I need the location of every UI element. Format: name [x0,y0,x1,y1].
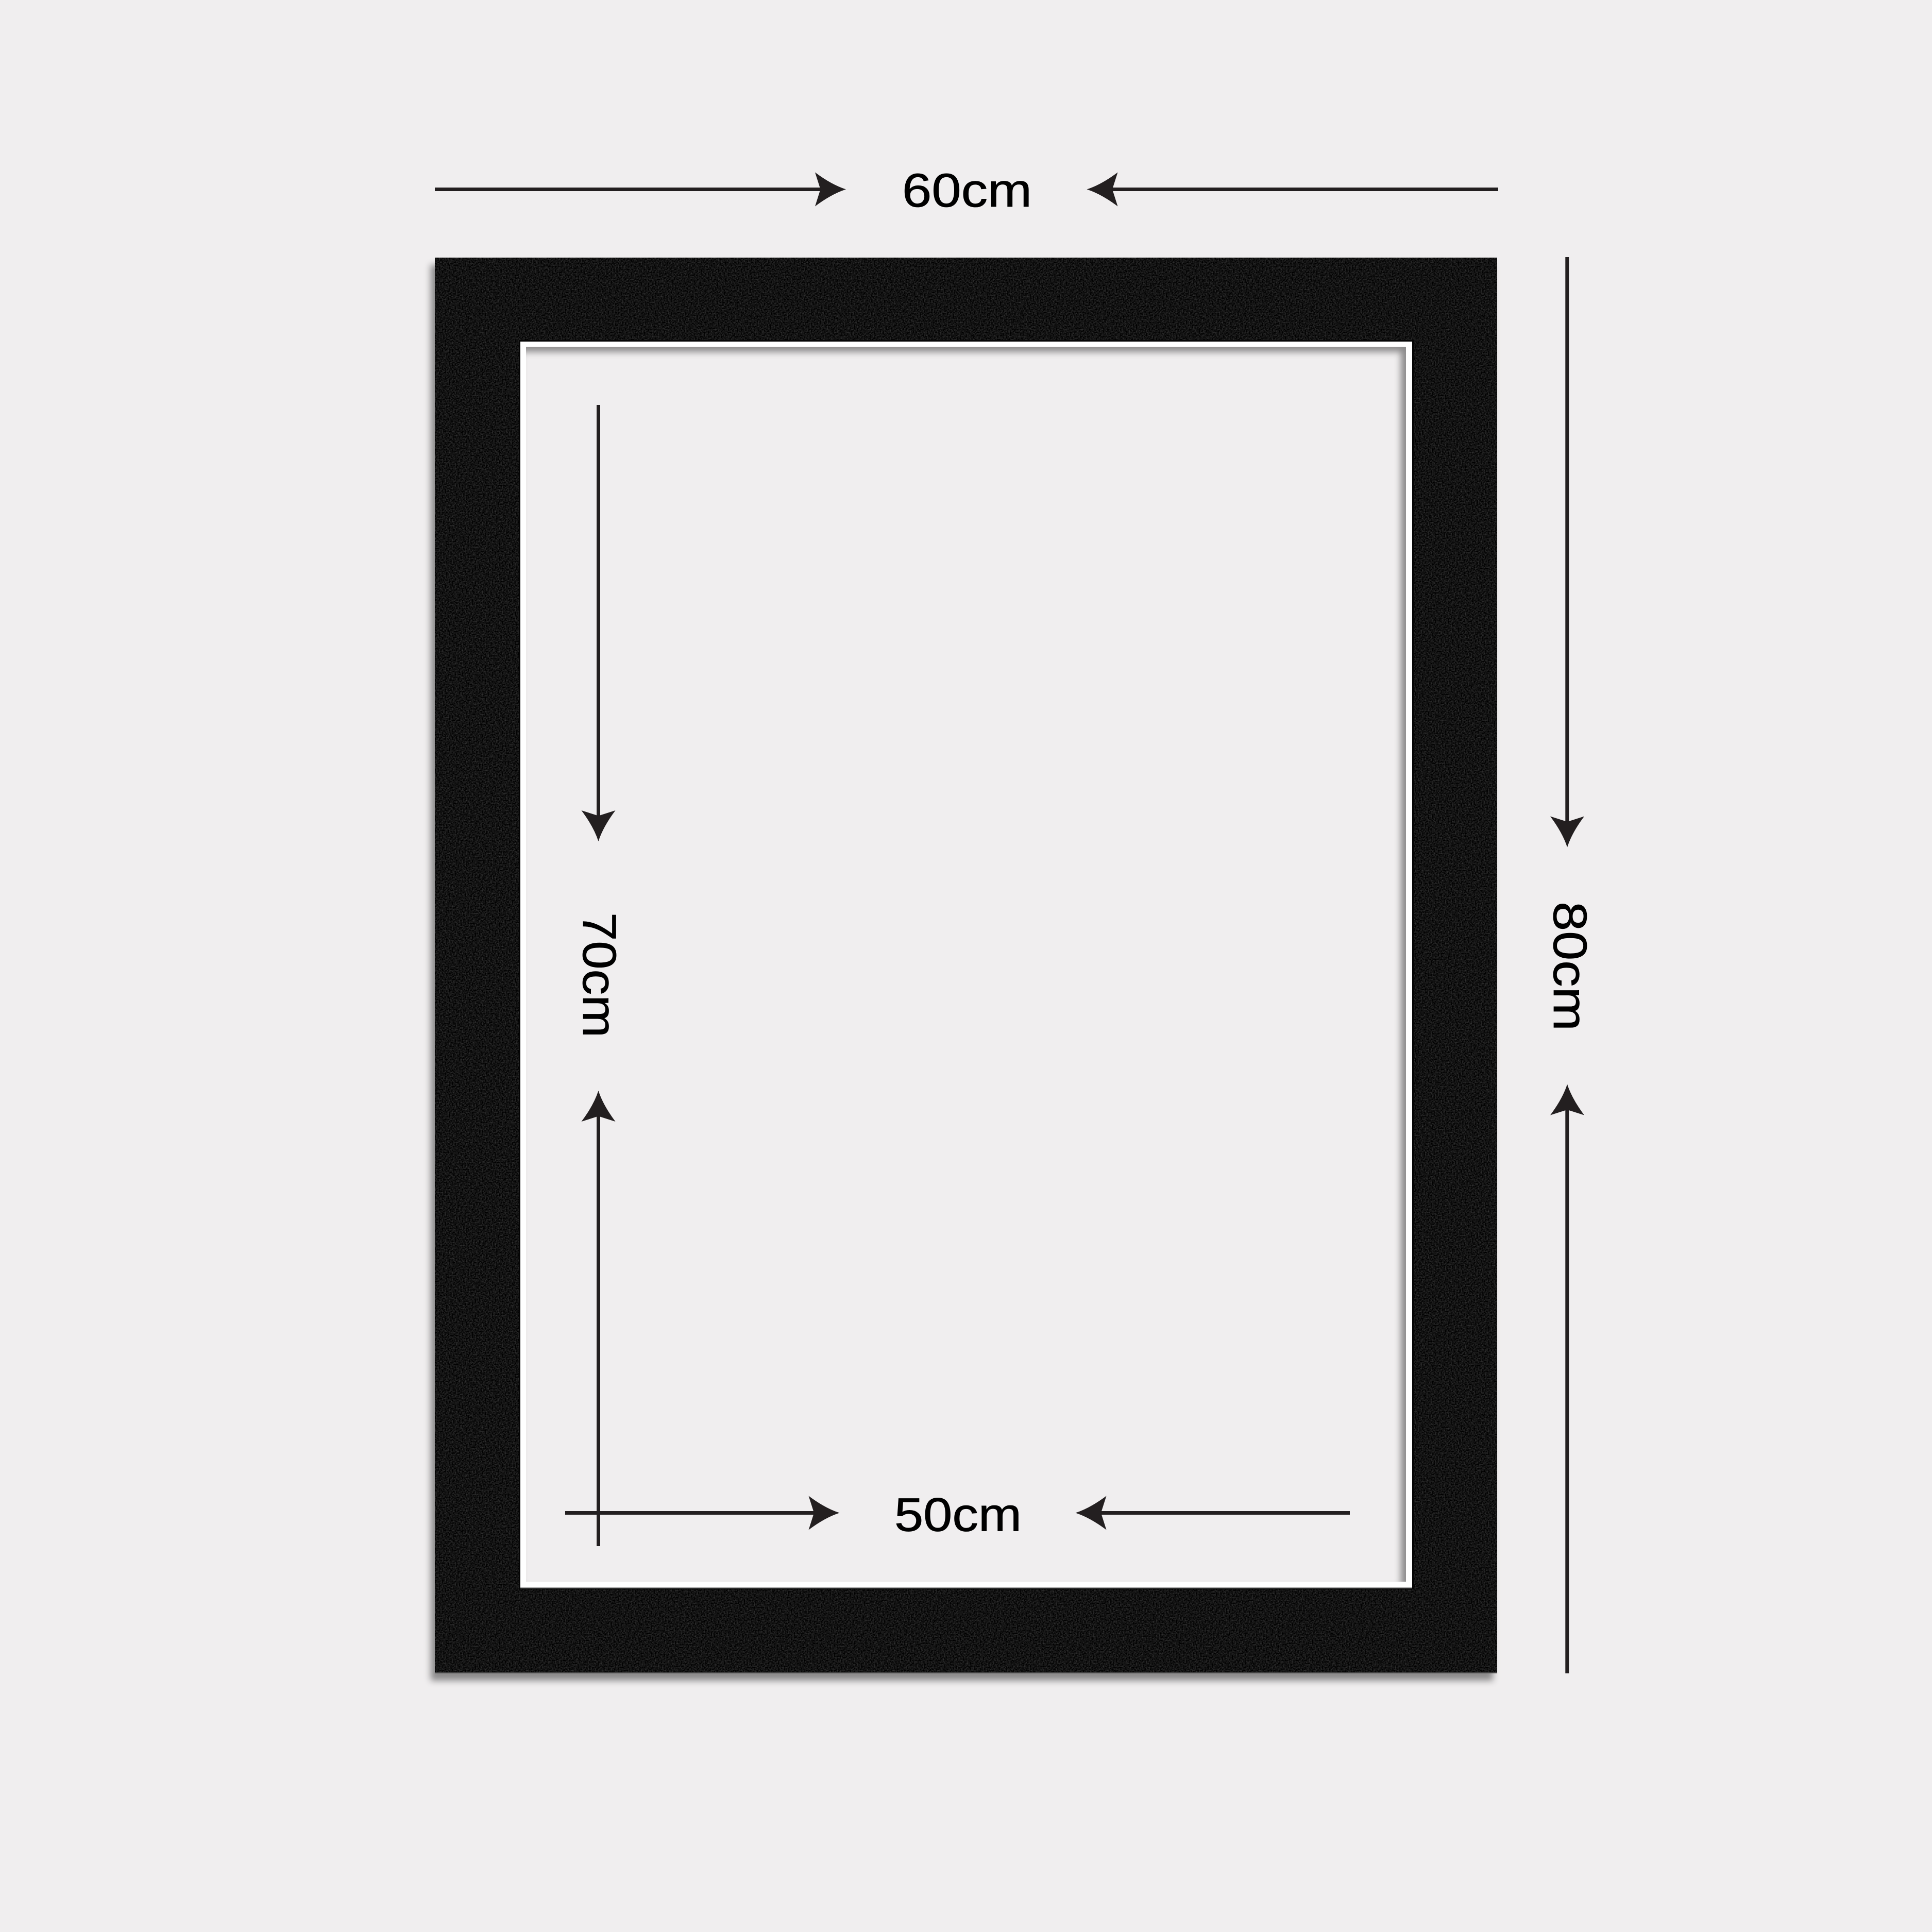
arrow: outer width, left side pointing right [435,172,846,206]
label: inner height 70cm: 70cm [573,912,625,1038]
opening: inner window with cast shadow [526,347,1406,1582]
opening: dark cut edge of window [519,340,1414,1589]
texture: black mat board grain [435,258,1497,1673]
arrow: inner height, bottom side pointing up [581,1091,615,1546]
label: outer width 60cm: 60cm [902,164,1032,217]
arrow: outer height, bottom side pointing up [1550,1084,1584,1673]
arrow: outer width, right side pointing left [1087,172,1498,206]
arrow: inner height, top side pointing down [581,405,615,841]
label: inner width 50cm: 50cm [894,1489,1022,1541]
panel: black mat board frame [435,258,1497,1673]
opening: white bevel of window [520,342,1412,1588]
arrow: inner width, right side pointing left [1076,1496,1350,1530]
label: outer height 80cm: 80cm [1544,902,1596,1031]
arrow: outer height, top side pointing down [1550,257,1584,847]
arrow: inner width, left side pointing right [565,1496,840,1530]
